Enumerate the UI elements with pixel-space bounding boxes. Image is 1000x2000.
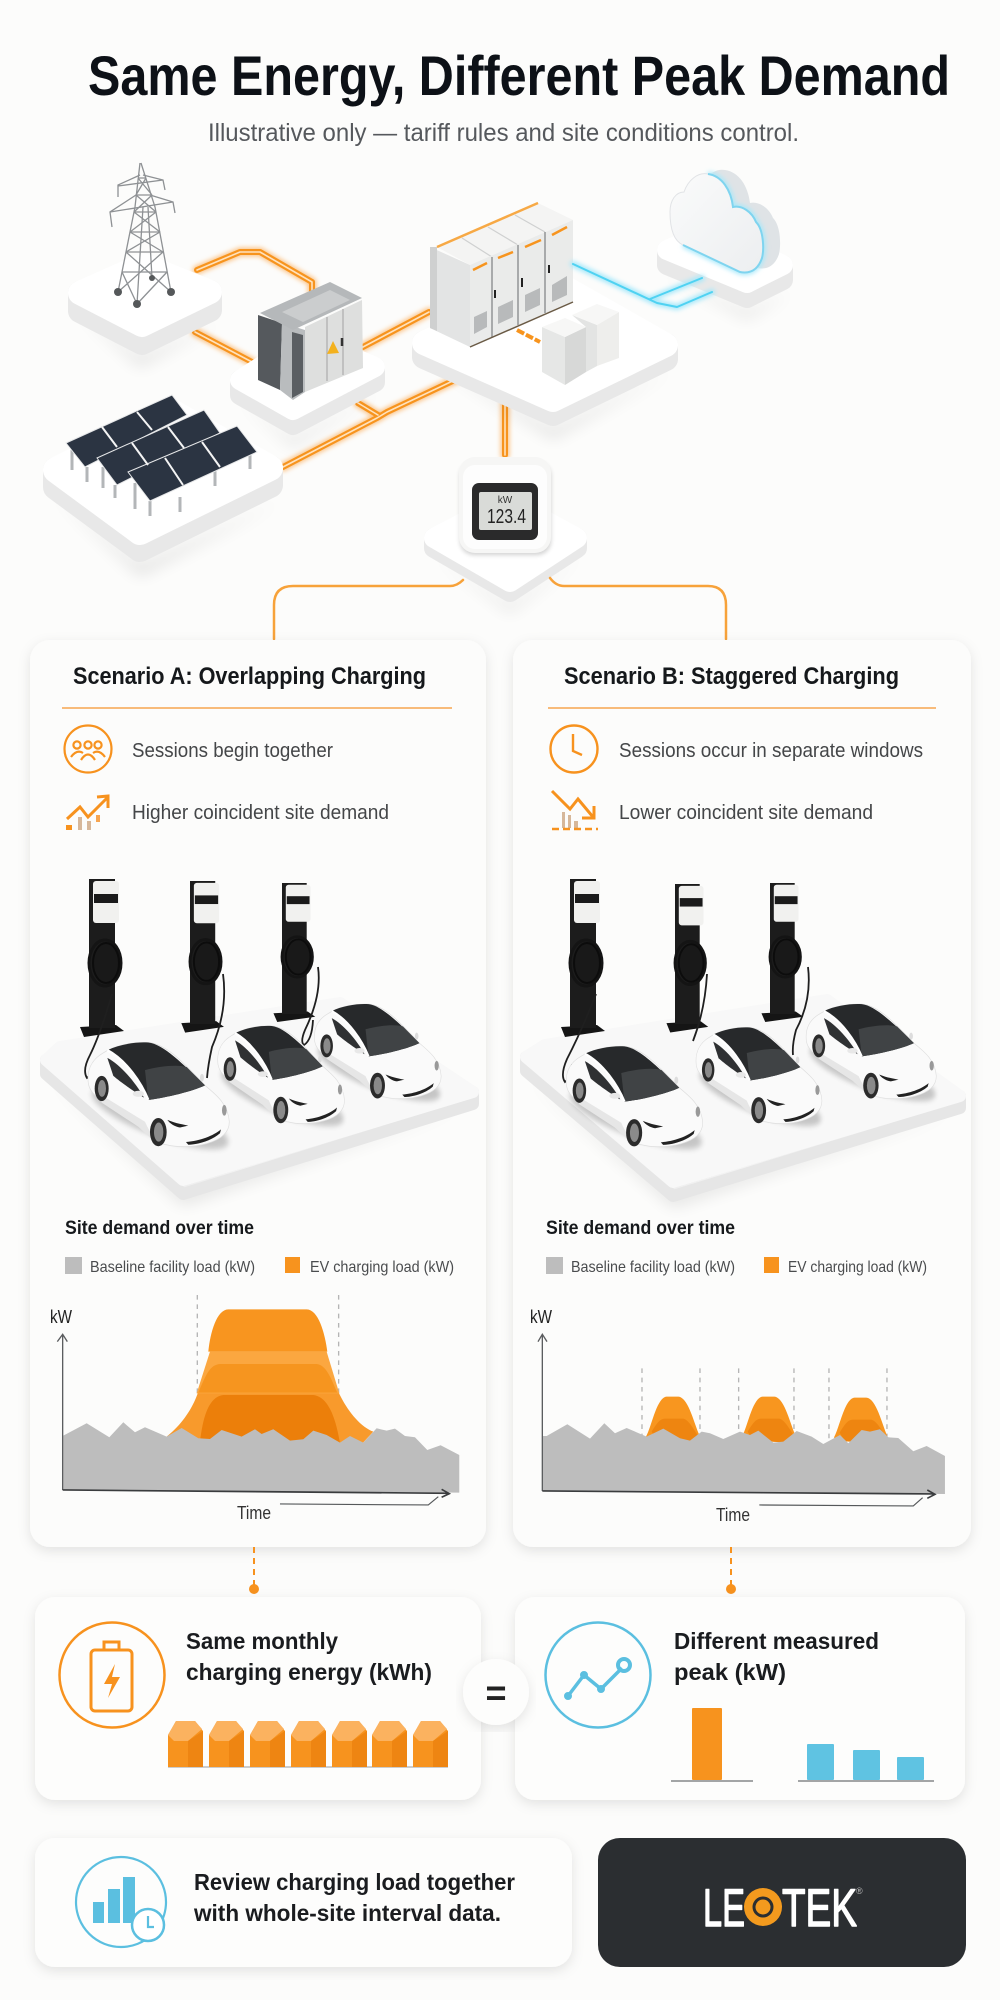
logo: LEOTEK: LE <box>703 1879 745 1938</box>
chargers B <box>561 879 803 1037</box>
legend A: EV charging load (kW) <box>310 1259 454 1276</box>
logo: LEOTEK: TEK <box>782 1879 857 1938</box>
icon: rising demand <box>66 796 108 830</box>
logo: LEOTEK <box>703 1879 863 1938</box>
icon: battery <box>60 1622 164 1728</box>
platform: inverter <box>236 338 384 446</box>
connectors to result panels <box>249 1547 736 1594</box>
text: lower coincident site demand: Lower coincident site demand <box>619 802 873 824</box>
cars B <box>565 1004 940 1161</box>
chart B <box>530 1307 945 1525</box>
charging cables A <box>85 967 319 1078</box>
icon: interval data <box>76 1857 166 1947</box>
platform: storage racks <box>418 282 676 438</box>
charging platform B <box>525 1000 962 1207</box>
platform: grid tower <box>72 265 220 366</box>
battery storage racks <box>430 203 573 347</box>
panel: different peak: peak (kW) <box>674 1659 786 1685</box>
legend A <box>65 1257 454 1276</box>
text: sessions begin together: Sessions begin together <box>132 740 333 762</box>
logo: LEOTEK: ® <box>856 1886 863 1896</box>
cars A <box>87 1004 445 1162</box>
subtitle: Illustrative only — tariff rules and site conditions control. <box>208 119 799 147</box>
peak bars <box>671 1708 934 1781</box>
heading: scenario B: Scenario B: Staggered Charging <box>564 663 899 690</box>
subheading: site demand: Site demand over time <box>546 1217 735 1239</box>
icon: falling demand <box>552 791 598 829</box>
meter: 123.4 <box>487 506 526 528</box>
icon: peak line <box>546 1622 650 1728</box>
panel: recommendation: with whole-site interval data. <box>193 1900 501 1926</box>
chart B: kW <box>530 1307 552 1327</box>
chart A <box>50 1295 459 1523</box>
chart B: Time <box>716 1505 750 1525</box>
meter: kW <box>498 495 513 506</box>
equals badge: = <box>485 1672 507 1713</box>
panel: recommendation <box>35 1838 572 1967</box>
legend A: Baseline facility load (kW) <box>90 1259 255 1276</box>
chart A: kW <box>50 1307 72 1327</box>
data connector <box>573 264 712 307</box>
system diagram <box>50 163 792 639</box>
panel: scenario A <box>30 640 486 1547</box>
inverter cabinet <box>258 282 363 400</box>
meter <box>459 457 551 555</box>
text: same monthly energy: Same monthly <box>186 1628 338 1654</box>
icon: cloud <box>670 170 780 272</box>
subheading: site demand: Site demand over time <box>65 1217 254 1239</box>
small cabinets <box>542 304 619 385</box>
icon: people <box>64 726 112 772</box>
platform: meter <box>430 500 587 612</box>
panel: logo <box>598 1838 966 1967</box>
chargers A <box>80 879 315 1037</box>
panel: same energy <box>35 1597 481 1800</box>
text: higher coincident site demand: Higher coincident site demand <box>132 802 389 824</box>
text: recommendation: Review charging load together <box>194 1869 515 1895</box>
platform: solar <box>50 412 283 575</box>
legend B: Baseline facility load (kW) <box>571 1259 735 1276</box>
icon: clock <box>550 726 598 772</box>
charging cables B <box>563 967 809 1082</box>
charging platform A <box>46 1003 473 1205</box>
panel: same energy: charging energy (kWh) <box>186 1659 432 1685</box>
legend B <box>546 1257 927 1276</box>
orange power connectors <box>195 252 505 467</box>
text: different measured peak: Different measured <box>674 1628 879 1654</box>
panel: different peak <box>515 1597 965 1800</box>
text: sessions occur in separate windows: Sessions occur in separate windows <box>619 740 923 762</box>
icon: transmission tower <box>110 163 175 308</box>
rack link <box>517 330 540 342</box>
solar array <box>66 395 257 516</box>
panel: scenario B <box>513 640 971 1547</box>
equals badge <box>463 1659 529 1725</box>
energy blocks <box>168 1721 448 1767</box>
chart A: Time <box>237 1503 271 1523</box>
heading: scenario A: Scenario A: Overlapping Charging <box>73 663 426 690</box>
platform: cloud <box>660 232 792 318</box>
legend B: EV charging load (kW) <box>788 1259 927 1276</box>
connector to scenario panels <box>274 578 726 639</box>
